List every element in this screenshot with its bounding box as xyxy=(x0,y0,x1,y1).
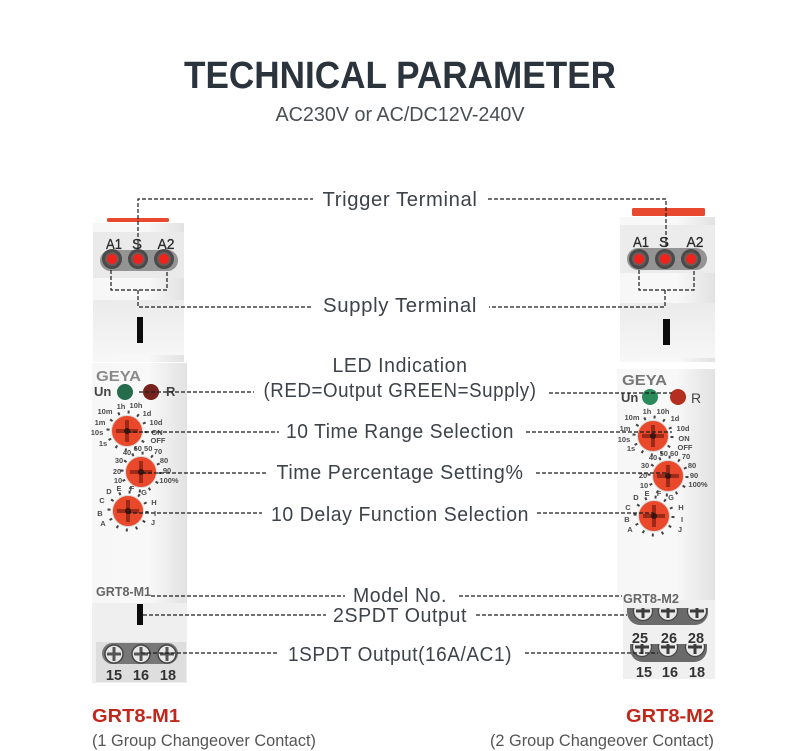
label: Trigger Terminal with leader lines xyxy=(138,189,666,249)
device: GRT8-M2 relay xyxy=(617,208,715,681)
device: GRT8-M1 relay: 90 xyxy=(163,466,171,475)
label: 1SPDT Output with leader lines: 1SPDT Output(16A/AC1) xyxy=(288,644,512,666)
device: GRT8-M1 relay: GRT8-M1 xyxy=(96,585,151,599)
device: GRT8-M2 relay: ON xyxy=(678,434,690,443)
device: GRT8-M1 relay: 70 xyxy=(154,447,162,456)
device: GRT8-M2 relay: 25 xyxy=(632,631,648,647)
device: GRT8-M1 relay: 15 xyxy=(106,668,122,684)
device: GRT8-M2 relay: 80 xyxy=(688,461,696,470)
device: GRT8-M2 relay: 26 xyxy=(661,631,677,647)
device: GRT8-M2 relay: C xyxy=(625,503,631,512)
subtitle: AC230V or AC/DC12V-240V xyxy=(276,104,525,126)
device: GRT8-M2 relay: GRT8-M2 xyxy=(623,592,679,606)
device: GRT8-M2 relay: 10s xyxy=(618,435,630,444)
device: GRT8-M2 relay: 100% xyxy=(688,480,708,489)
device: GRT8-M2 relay: 1d xyxy=(671,414,680,423)
device: GRT8-M2 relay: 50 60 xyxy=(660,449,678,458)
device: GRT8-M1 relay: C xyxy=(99,496,105,505)
device: GRT8-M2 relay: S xyxy=(659,234,669,251)
device: GRT8-M2 relay: 10 xyxy=(640,481,648,490)
device: GRT8-M2 relay: 1h xyxy=(643,407,652,416)
device: GRT8-M2 relay: 40 xyxy=(649,453,657,462)
device: GRT8-M1 relay: H xyxy=(151,498,157,507)
device: GRT8-M2 relay: 20 xyxy=(639,471,647,480)
caption: GRT8-M1 xyxy=(92,706,316,750)
device: GRT8-M2 relay: GEYA xyxy=(622,372,667,389)
device: GRT8-M2 relay: F xyxy=(657,489,662,498)
label: Time Percentage Setting with leader lines: Time Percentage Setting% xyxy=(276,462,524,484)
device: GRT8-M2 relay: G xyxy=(668,493,674,502)
label: 2SPDT Output with leader lines: 2SPDT Output xyxy=(333,605,467,627)
device: GRT8-M2 relay: 1m xyxy=(620,424,631,433)
device: GRT8-M1 relay: B xyxy=(97,509,103,518)
device: GRT8-M1 relay: 1d xyxy=(143,409,152,418)
device: GRT8-M1 relay: A xyxy=(100,519,106,528)
device: GRT8-M1 relay: OFF xyxy=(150,436,166,445)
caption: GRT8-M1: GRT8-M1 xyxy=(92,706,180,726)
device: GRT8-M1 relay: 20 xyxy=(113,467,121,476)
device: GRT8-M2 relay: H xyxy=(678,503,684,512)
device: GRT8-M2 relay: A2 xyxy=(686,234,704,251)
label: LED Indication with leader lines: (RED=Output GREEN=Supply) xyxy=(264,380,536,402)
label: Supply Terminal with leader lines: Supply Terminal xyxy=(323,295,477,317)
device: GRT8-M2 relay: 16 xyxy=(662,665,678,681)
device: GRT8-M2 relay: 28 xyxy=(688,631,704,647)
device: GRT8-M2 relay: A1 xyxy=(633,234,649,251)
label: LED Indication with leader lines xyxy=(139,355,672,402)
device: GRT8-M1 relay: A1 xyxy=(106,236,122,253)
device: GRT8-M1 relay: 1m xyxy=(95,418,106,427)
label: Model No. with leader lines: Model No. xyxy=(353,585,447,607)
device: GRT8-M1 relay: 16 xyxy=(133,668,149,684)
device: GRT8-M1 relay: 40 xyxy=(123,448,131,457)
device: GRT8-M2 relay: 30 xyxy=(641,461,649,470)
device: GRT8-M2 relay: B xyxy=(624,515,630,524)
device: GRT8-M2 relay: J xyxy=(678,525,682,534)
device: GRT8-M2 relay: 90 xyxy=(690,471,698,480)
device: GRT8-M1 relay: I xyxy=(154,509,156,518)
device: GRT8-M2 relay: OFF xyxy=(678,443,693,452)
device: GRT8-M1 relay: 60 50 xyxy=(134,444,152,453)
device: GRT8-M2 relay: A xyxy=(627,525,633,534)
device: GRT8-M1 relay: 10s xyxy=(91,428,103,437)
device: GRT8-M2 relay: R xyxy=(691,390,701,406)
device: GRT8-M2 relay: D xyxy=(633,493,639,502)
title: TECHNICAL PARAMETER xyxy=(184,55,616,97)
caption: GRT8-M2: (2 Group Changeover Contact) xyxy=(490,731,714,750)
device: GRT8-M1 relay: 30 xyxy=(115,456,123,465)
device: GRT8-M1 relay: 10h xyxy=(130,401,143,410)
label: Trigger Terminal with leader lines: Trigger Terminal xyxy=(322,189,478,211)
device: GRT8-M1 relay: R xyxy=(166,384,176,399)
label: 10 Delay Function Selection with leader lines: 10 Delay Function Selection xyxy=(271,504,529,526)
device: GRT8-M2 relay: 10h xyxy=(657,407,670,416)
device: GRT8-M1 relay: G xyxy=(141,488,147,497)
device: GRT8-M2 relay: 70 xyxy=(682,452,690,461)
caption: GRT8-M2: GRT8-M2 xyxy=(626,706,714,726)
device: GRT8-M1 relay: 10d xyxy=(150,418,163,427)
device: GRT8-M1 relay: J xyxy=(151,518,155,527)
device: GRT8-M1 relay: GEYA xyxy=(96,368,141,385)
device: GRT8-M2 relay: 10m xyxy=(624,413,640,422)
caption: GRT8-M1: (1 Group Changeover Contact) xyxy=(92,731,316,750)
device: GRT8-M2 relay: 18 xyxy=(689,665,705,681)
label: 10 Time Range Selection with leader lines: 10 Time Range Selection xyxy=(286,421,514,443)
device: GRT8-M2 relay: 10d xyxy=(677,424,690,433)
device: GRT8-M1 relay: 10m xyxy=(97,407,113,416)
device: GRT8-M1 relay: E xyxy=(116,484,122,493)
device: GRT8-M2 relay: E xyxy=(644,489,650,498)
device: GRT8-M1 relay: D xyxy=(106,487,112,496)
device: GRT8-M2 relay: Un xyxy=(621,390,638,405)
device: GRT8-M1 relay: S xyxy=(132,236,142,253)
device: GRT8-M1 relay: F xyxy=(130,484,135,493)
device: GRT8-M2 relay: 15 xyxy=(636,665,652,681)
device: GRT8-M1 relay: 80 xyxy=(160,456,168,465)
device: GRT8-M2 relay: I xyxy=(681,515,683,524)
caption: GRT8-M2 xyxy=(490,706,714,750)
device: GRT8-M1 relay xyxy=(91,218,187,684)
device: GRT8-M1 relay: 10 xyxy=(114,476,122,485)
label: Supply Terminal with leader lines xyxy=(111,270,694,317)
label: LED Indication with leader lines: LED Indication xyxy=(332,355,468,377)
device: GRT8-M1 relay: 1h xyxy=(117,402,126,411)
device: GRT8-M1 relay: 18 xyxy=(160,668,176,684)
device: GRT8-M1 relay: 100% xyxy=(159,476,179,485)
device: GRT8-M1 relay: Un xyxy=(94,384,111,399)
device: GRT8-M1 relay: A2 xyxy=(158,236,174,253)
device: GRT8-M1 relay: 1s xyxy=(99,439,107,448)
device: GRT8-M1 relay: ON xyxy=(151,428,163,437)
device: GRT8-M2 relay: 1s xyxy=(627,444,635,453)
